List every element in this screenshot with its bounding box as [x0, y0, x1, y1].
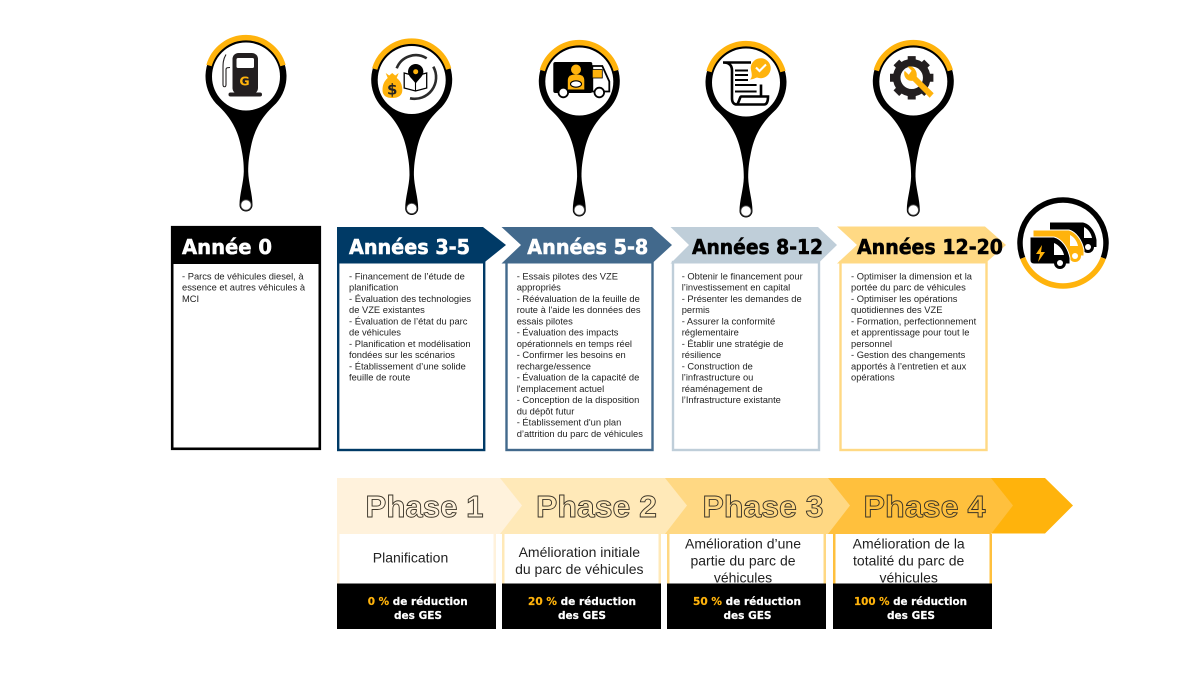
arrow: phase 2	[500, 478, 687, 534]
text: phase 3 description: partie du parc de	[690, 552, 796, 568]
callout: phase 3 GHG reduction: des GES	[724, 610, 772, 622]
text: Années 5-8 items: l'emplacement actuel	[517, 384, 604, 394]
icon: fuel pump	[223, 53, 262, 96]
text: Années 12-20 items: portée du parc de véhicules	[851, 283, 966, 293]
text: Années 12-20 items: - Gestion des changements	[851, 350, 966, 360]
header: Années 5-8	[502, 227, 672, 264]
text: Années 5-8 items: du dépôt futur	[517, 406, 574, 416]
text: Années 12-20 items: quotidiennes des VZE	[851, 305, 942, 315]
header: Années 8-12	[670, 227, 837, 264]
header: Années 12-20: Années 12-20	[857, 235, 1003, 259]
text: Années 5-8 items: - Établissement d'un plan	[517, 418, 621, 428]
text: Années 8-12 items: réglementaire	[682, 328, 739, 338]
text: Années 12-20 items: et apprentissage pour tout le	[851, 328, 969, 338]
text: Années 3-5 items: - Établissement d’une solide	[349, 361, 466, 371]
text: Années 3-5 items: - Évaluation des technologies	[349, 294, 471, 304]
panel: Années 5-8	[502, 227, 672, 450]
callout: phase 4 GHG reduction	[833, 584, 992, 629]
text: Années 5-8 items: - Essais pilotes des VZE	[517, 271, 618, 281]
text: phase 3 description: Amélioration d’une	[685, 536, 801, 552]
text: Années 3-5 items: de véhicules	[349, 328, 401, 338]
pin: permit scroll, years 8-12	[706, 42, 786, 217]
panel: Années 12-20	[837, 226, 1006, 450]
heading: Phase 1: Phase 1	[366, 490, 484, 524]
heading: Phase 2: Phase 2	[536, 490, 657, 524]
arrow: phase 4	[828, 478, 1013, 534]
text: Années 3-5 items: planification	[349, 283, 398, 293]
text: Années 5-8 items: - Réévaluation de la feuille de	[517, 294, 640, 304]
text: phase 2 description: Amélioration initiale	[519, 544, 640, 560]
text: Années 12-20 items: apportés à l’entretien et aux	[851, 361, 967, 371]
heading: Phase 3: Phase 3	[702, 490, 824, 524]
arrow: phase timeline	[337, 478, 1073, 534]
pin: gear and wrench, years 12-20	[873, 41, 954, 216]
text: Années 3-5 items: fondées sur les scénarios	[349, 350, 455, 360]
text: Années 5-8 items: - Confirmer les besoins en	[517, 350, 626, 360]
icon: fuel pump: G	[239, 74, 250, 88]
arrow: phase 3	[665, 478, 850, 534]
text: phase 2 description: du parc de véhicules	[515, 561, 644, 577]
text: Années 8-12 items: l’Infrastructure existante	[682, 395, 781, 405]
text: Années 5-8 items: opérationnels en temps réel	[517, 339, 632, 349]
callout: phase 2 GHG reduction	[502, 584, 661, 629]
pin: financing and map, years 3-5	[371, 39, 452, 215]
header: Années 3-5: Années 3-5	[349, 235, 470, 259]
text: Années 5-8 items: recharge/essence	[517, 361, 591, 371]
text: Années 12-20 items: personnel	[851, 339, 892, 349]
icon: truck with driver	[553, 62, 609, 97]
header: Années 8-12: Années 8-12	[692, 235, 823, 259]
text: Années 12-20 items: - Formation, perfectionnement	[851, 316, 977, 326]
text: phase 3 description: véhicules	[714, 569, 772, 585]
header: Années 5-8: Années 5-8	[527, 235, 648, 259]
callout: phase 2 GHG reduction: des GES	[558, 610, 606, 622]
callout: phase 3 GHG reduction: 50 % de réduction	[693, 596, 801, 608]
text: Années 5-8 items: - Évaluation des impacts	[517, 328, 619, 338]
icon: electric truck fleet	[1020, 200, 1106, 286]
callout: phase 1 GHG reduction	[337, 584, 496, 629]
text: Année 0 items: MCI	[182, 294, 199, 304]
icon: money bag and map pin	[382, 55, 436, 99]
panel: Années 3-5	[337, 227, 506, 450]
text: Années 3-5 items: - Évaluation de l’état du parc	[349, 316, 468, 326]
panel: phase 2 details	[502, 534, 661, 629]
callout: phase 4 GHG reduction: des GES	[887, 610, 935, 622]
panel: phase 1 details	[337, 534, 496, 629]
callout: phase 3 GHG reduction	[667, 584, 826, 629]
text: Années 8-12 items: résilience	[682, 350, 721, 360]
text: phase 4 description: totalité du parc de	[853, 552, 965, 568]
panel: phase 4 details	[833, 534, 992, 629]
heading: Phase 4: Phase 4	[864, 490, 986, 524]
icon: scroll with check mark	[723, 58, 771, 104]
icon: money bag and map pin: $	[387, 80, 397, 98]
text: Années 8-12 items: réaménagement de	[682, 384, 763, 394]
text: Années 8-12 items: - Construction de	[682, 361, 753, 371]
text: Années 12-20 items: opérations	[851, 373, 895, 383]
pin: fuel pump, year 0	[206, 36, 286, 211]
header: Années 3-5	[337, 227, 506, 264]
text: Années 3-5 items: feuille de route	[349, 373, 410, 383]
text: phase 4 description: véhicules	[880, 569, 938, 585]
text: Années 5-8 items: d’attrition du parc de véhicules	[517, 429, 643, 439]
panel: Année 0	[171, 226, 321, 449]
text: phase 1 description: Planification	[373, 550, 448, 566]
text: Années 8-12 items: permis	[682, 305, 710, 315]
text: Années 3-5 items: - Planification et modélisation	[349, 339, 471, 349]
callout: phase 1 GHG reduction: 0 % de réduction	[368, 596, 468, 608]
text: Année 0 items: essence et autres véhicules à	[182, 283, 306, 293]
pin: driver and truck, years 5-8	[539, 41, 620, 216]
text: Années 12-20 items: - Optimiser la dimension et la	[851, 271, 973, 281]
text: Années 5-8 items: appropriés	[517, 283, 561, 293]
header: Année 0	[171, 226, 321, 264]
header: Année 0: Année 0	[182, 235, 272, 259]
text: Années 3-5 items: de VZE existantes	[349, 305, 425, 315]
text: Années 8-12 items: l’investissement en capital	[682, 283, 790, 293]
text: Années 5-8 items: - Évaluation de la capacité de	[517, 373, 639, 383]
text: Années 12-20 items: - Optimiser les opérations	[851, 294, 958, 304]
text: Années 5-8 items: - Conception de la disposition	[517, 395, 639, 405]
callout: phase 4 GHG reduction: 100 % de réduction	[854, 596, 967, 608]
text: phase 4 description: Amélioration de la	[853, 536, 965, 552]
text: Année 0 items: - Parcs de véhicules diesel, à	[182, 271, 304, 281]
panel: Années 8-12	[670, 227, 837, 450]
callout: phase 2 GHG reduction: 20 % de réduction	[528, 596, 636, 608]
arrow: phase 1	[337, 478, 522, 534]
text: Années 8-12 items: - Obtenir le financement pour	[682, 271, 803, 281]
text: Années 3-5 items: - Financement de l’étude de	[349, 271, 465, 281]
callout: phase 1 GHG reduction: des GES	[394, 610, 442, 622]
text: Années 8-12 items: l’infrastructure ou	[682, 373, 753, 383]
panel: phase 3 details	[667, 534, 826, 629]
icon: gear and wrench	[881, 47, 942, 108]
text: Années 8-12 items: - Présenter les demandes de	[682, 294, 802, 304]
header: Années 12-20	[837, 226, 1006, 264]
text: Années 5-8 items: route à l'aide les données des	[517, 305, 641, 315]
text: Années 8-12 items: - Établir une stratégie de	[682, 339, 784, 349]
text: Années 8-12 items: - Assurer la conformité	[682, 316, 775, 326]
text: Années 5-8 items: essais pilotes	[517, 316, 573, 326]
